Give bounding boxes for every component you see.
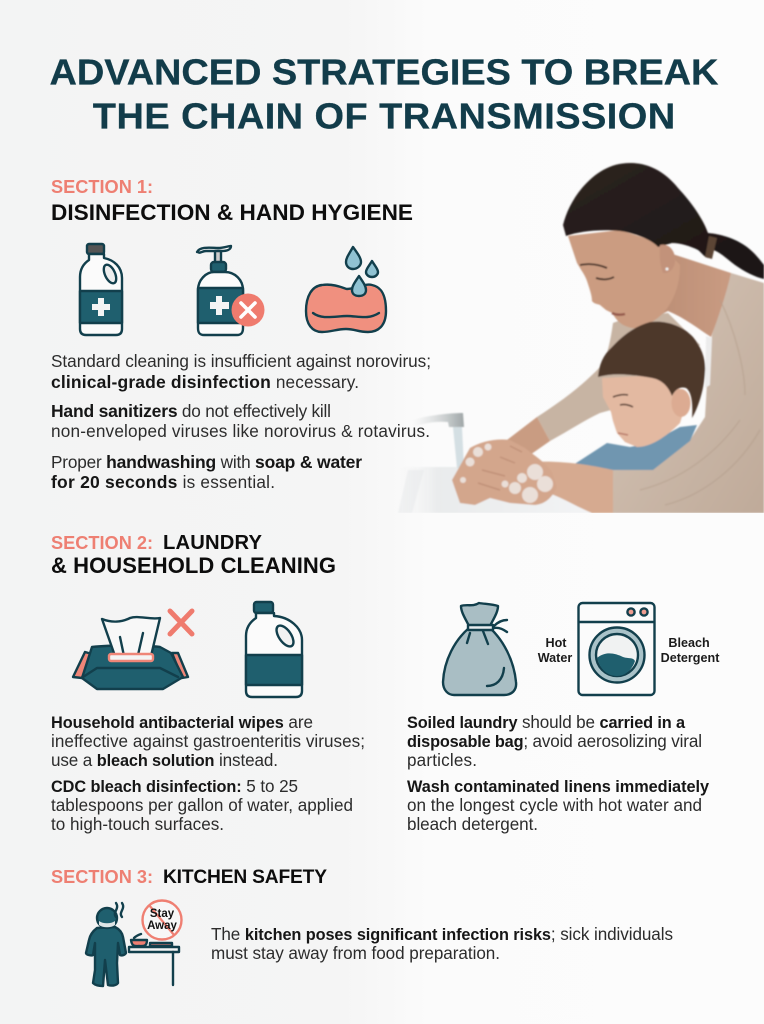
section 1 body text: Standard cleaning is insufficient against norovirus; — [51, 351, 431, 371]
section 2 right text — [407, 713, 709, 834]
sleeve folds — [641, 306, 744, 501]
mother's ear — [660, 245, 675, 273]
section 1 body text: Proper handwashing with soap & water — [51, 452, 362, 472]
mother's face — [568, 230, 680, 328]
fever steam — [115, 903, 123, 917]
section 2 right text: bleach detergent. — [407, 815, 538, 834]
section 2 left text: to high-touch surfaces. — [51, 815, 224, 834]
photo: mother helping child wash hands at a sink — [396, 163, 764, 513]
water stream — [453, 427, 464, 468]
child's face — [602, 375, 688, 447]
icon: tied laundry bag — [443, 603, 516, 695]
faucet — [412, 413, 464, 427]
section 3 body text — [211, 925, 673, 963]
section 1 heading: SECTION 1: — [51, 177, 153, 197]
hands — [452, 439, 557, 505]
section 1 body text: for 20 seconds is essential. — [51, 472, 275, 492]
soap foam on hands — [460, 444, 553, 503]
section 2 left text: CDC bleach disinfection: 5 to 25 — [51, 777, 298, 796]
section 2 left text — [51, 713, 365, 834]
mother's hair and ponytail — [563, 163, 764, 279]
white top — [705, 336, 712, 388]
section 2 left text: ineffective against gastroenteritis viruses; — [51, 732, 365, 751]
icon: sick person kept away from kitchen — [86, 900, 182, 986]
person — [86, 927, 126, 986]
mother's neck — [662, 254, 732, 338]
tray — [150, 943, 172, 946]
cardigan far sleeve — [537, 313, 700, 441]
section 3 body text: must stay away from food preparation. — [211, 944, 500, 963]
section 2 left text: tablespoons per gallon of water, applied — [51, 796, 353, 815]
hot water label — [538, 636, 572, 665]
title: THE CHAIN OF TRANSMISSION — [93, 96, 675, 136]
bowl — [134, 934, 141, 938]
title — [50, 52, 719, 136]
section 2 right text: particles. — [407, 751, 477, 770]
icon: antibacterial wipes with cross — [73, 611, 192, 689]
cardigan shoulder and back — [613, 273, 764, 513]
child's mouth — [618, 433, 628, 435]
section 1 body text: Hand sanitizers do not effectively kill — [51, 401, 331, 421]
section 2 heading — [51, 532, 336, 578]
bleach detergent label — [661, 636, 720, 665]
section 3 body text: The kitchen poses significant infection risks; sick individuals — [211, 925, 673, 944]
stay away sign — [142, 900, 182, 940]
section 2 heading: & HOUSEHOLD CLEANING — [51, 553, 336, 578]
section 2 left text: Household antibacterial wipes are — [51, 713, 313, 732]
mother's lips — [612, 313, 625, 315]
section 2 right text: Soiled laundry should be carried in a — [407, 713, 686, 732]
child's hair — [598, 322, 705, 418]
section 2 right text: disposable bag; avoid aerosolizing viral — [407, 732, 702, 751]
section 3 heading: SECTION 3: — [51, 867, 153, 887]
bleach detergent label: Detergent — [661, 651, 720, 665]
child's eye and brow — [613, 395, 633, 407]
section 2 left text: use a bleach solution instead. — [51, 751, 278, 770]
section 1 heading: DISINFECTION & HAND HYGIENE — [51, 200, 413, 225]
title: ADVANCED STRATEGIES TO BREAK — [50, 52, 719, 92]
hot water label: Hot — [546, 636, 567, 650]
table — [129, 947, 179, 952]
hair tie — [705, 236, 717, 259]
fingers — [478, 446, 522, 490]
section 1 body text: non-enveloped viruses like norovirus & rotavirus. — [51, 421, 430, 441]
icon: soap bar with water drops — [306, 247, 386, 332]
bleach detergent label: Bleach — [668, 636, 710, 650]
section 1 heading — [51, 177, 413, 225]
icon: disinfectant bottle — [80, 244, 122, 335]
mother's far forearm — [505, 417, 550, 457]
section 1 body text — [51, 351, 431, 492]
section 3 heading — [51, 867, 327, 888]
child's shirt — [570, 425, 697, 470]
sink — [422, 467, 586, 513]
earring — [666, 268, 668, 270]
section 2 right text: Wash contaminated linens immediately — [407, 778, 709, 796]
mother's near forearm — [542, 460, 614, 513]
section 2 heading: SECTION 2: — [51, 533, 153, 553]
section 2 heading: LAUNDRY — [163, 532, 263, 554]
icon: washing machine — [578, 603, 654, 695]
mother's brow and eye — [580, 264, 614, 279]
icon: bleach bottle — [246, 602, 302, 697]
hot water label: Water — [538, 651, 572, 665]
icon: sick person kept away from kitchen: Stay — [150, 908, 175, 920]
section 1 body text: clinical-grade disinfection necessary. — [51, 372, 359, 392]
section 2 right text: on the longest cycle with hot water and — [407, 796, 702, 815]
section 3 heading: KITCHEN SAFETY — [163, 867, 327, 888]
mask — [99, 921, 115, 927]
child's ear — [672, 389, 690, 417]
icon: hand sanitizer with cross — [197, 246, 264, 335]
icon: sick person kept away from kitchen: Away — [147, 920, 178, 932]
